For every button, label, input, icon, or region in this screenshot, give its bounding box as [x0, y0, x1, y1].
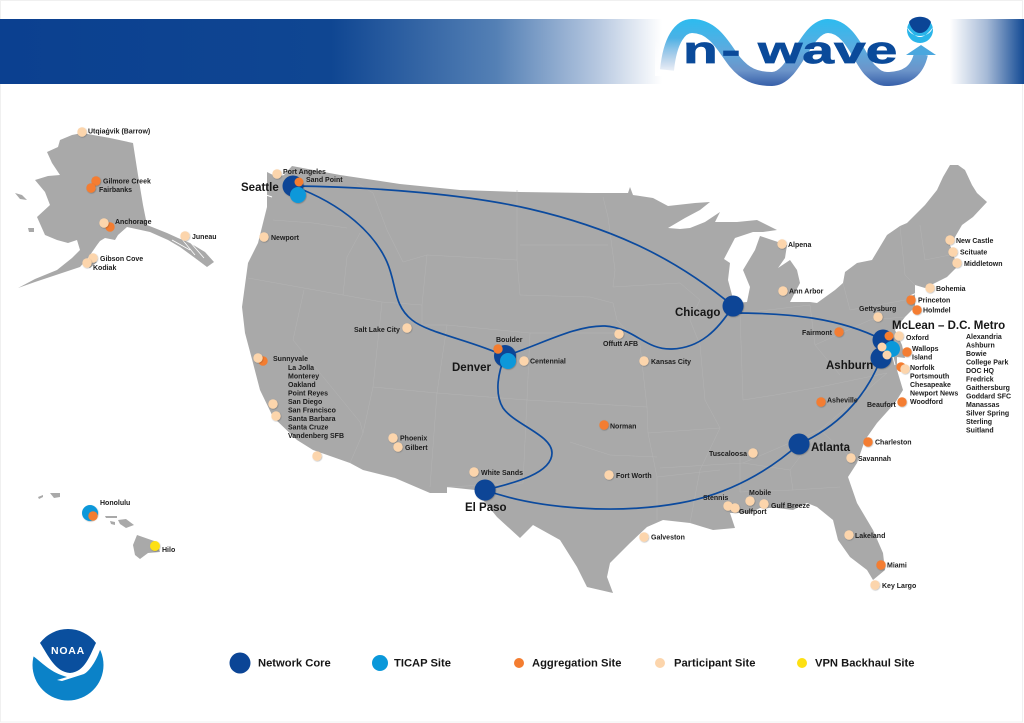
site: Asheville — [816, 397, 858, 407]
site: Utqiagvik: Utqiaġvik (Barrow) — [88, 128, 150, 136]
site: Fort Worth — [604, 470, 652, 480]
site: California cluster: La Jolla — [288, 365, 314, 372]
site: McLean metro list: Goddard SFC — [966, 394, 1011, 400]
site: Asheville: Asheville — [827, 398, 858, 404]
header band right — [950, 19, 1024, 84]
site: Fairmont — [802, 327, 844, 337]
site: Gettysburg — [859, 306, 896, 322]
site: McLean metro list: Fredrick — [966, 376, 994, 384]
legend — [230, 652, 914, 674]
site: Juneau — [180, 231, 217, 241]
site: White Sands: White Sands — [481, 470, 523, 477]
site: Phoenix — [388, 433, 427, 443]
site: Gibson Cove: Gibson Cove — [100, 256, 143, 263]
site: Scituate: Scituate — [960, 250, 987, 256]
site: Fort Worth: Fort Worth — [616, 473, 652, 480]
network links — [293, 186, 883, 509]
site: Norman: Norman — [610, 424, 636, 430]
logo: n-wave: n — [683, 29, 718, 72]
site: Chicago: Chicago — [675, 307, 720, 319]
site: Fairbanks: Fairbanks — [99, 187, 132, 194]
header band left — [0, 19, 662, 84]
site: Savannah — [846, 453, 891, 463]
site: McLean metro list: Alexandria — [966, 334, 1002, 341]
site: Norfolk cluster: Chesapeake — [910, 382, 951, 389]
site: Wallops Island: Wallops — [912, 346, 939, 353]
site: Beaufort — [867, 397, 907, 409]
site: California cluster: Monterey — [288, 374, 319, 380]
site: Gilmore Creek: Gilmore Creek — [103, 178, 151, 186]
site: Hilo — [150, 541, 175, 554]
site: McLean and Ashburn: McLean – D.C. Metro — [892, 320, 1005, 332]
site: Wallops Island — [902, 346, 939, 362]
site: Kansas City: Kansas City — [651, 359, 691, 366]
site: Ann Arbor: Ann Arbor — [789, 288, 824, 296]
site: Denver — [452, 337, 523, 374]
legend: VPN backhaul site: VPN Backhaul Site — [815, 658, 914, 670]
site: Oxford: Oxford — [906, 335, 929, 342]
site: Ann Arbor — [778, 286, 824, 296]
site: McLean metro list: DOC HQ — [966, 368, 995, 375]
legend: TICAP site — [372, 655, 451, 671]
site: Middletown — [952, 258, 1002, 268]
site: Holmdel: Holmdel — [923, 308, 951, 314]
site: Lakeland: Lakeland — [855, 533, 885, 540]
site: California cluster: Santa Cruze — [288, 424, 329, 432]
site: Gulf coast cluster: Mobile — [749, 490, 771, 497]
site: Tuscaloosa: Tuscaloosa — [709, 451, 747, 458]
site: Port Angeles: Port Angeles — [283, 169, 326, 176]
site: McLean metro list: Bowie — [966, 351, 987, 358]
site: Newport — [259, 232, 300, 242]
site: Norman — [599, 420, 636, 430]
site: Port Angeles — [272, 169, 326, 179]
site: Fairbanks — [86, 183, 132, 194]
logo: n-wave — [655, 17, 936, 79]
site: New Castle: New Castle — [956, 238, 993, 245]
site: California cluster: Point Reyes — [288, 390, 328, 398]
site: Atlanta: Atlanta — [811, 442, 851, 454]
site: Galveston — [639, 532, 685, 542]
site: California cluster — [253, 353, 344, 461]
logo: NOAA: NOAA — [51, 645, 85, 657]
site: McLean and Ashburn — [826, 320, 1005, 372]
site: Holmdel — [912, 305, 951, 315]
site: Alpena — [777, 239, 811, 249]
site: Tuscaloosa — [709, 448, 758, 458]
site: Anchorage — [99, 218, 152, 232]
site: California cluster: Vandenberg SFB — [288, 433, 344, 440]
site: Norfolk cluster: Newport News — [910, 390, 958, 398]
site: Denver: Boulder — [496, 337, 523, 344]
site: Juneau: Juneau — [192, 234, 217, 241]
site: El Paso: El Paso — [465, 502, 507, 514]
site: Seattle: Seattle — [241, 182, 279, 194]
site: Anchorage: Anchorage — [115, 219, 152, 226]
site: Hilo: Hilo — [162, 547, 175, 554]
site: Beaufort: Beaufort — [867, 402, 896, 409]
site: Wallops Island: Island — [912, 354, 932, 362]
site: Bohemia — [925, 283, 966, 293]
legend: network core: Network Core — [258, 658, 331, 670]
site: Offutt AFB: Offutt AFB — [603, 341, 638, 348]
site: California cluster: San Diego — [288, 399, 322, 406]
site: Gulf coast cluster: Gulf Breeze — [771, 503, 810, 510]
site: Gilbert — [393, 442, 428, 452]
site: Honolulu: Honolulu — [100, 500, 130, 507]
site: Key Largo: Key Largo — [882, 583, 916, 590]
site: Lakeland — [844, 530, 885, 540]
site: Phoenix: Phoenix — [400, 436, 427, 442]
site: Norfolk cluster: Norfolk — [910, 365, 935, 372]
site: Scituate — [948, 247, 987, 257]
site: Gibson Cove — [88, 253, 143, 263]
site: Norfolk cluster: Portsmouth — [910, 374, 949, 380]
logo: n-wave: - — [722, 29, 740, 72]
legend: TICAP site: TICAP Site — [394, 658, 451, 670]
site: McLean metro list: Sterling — [966, 419, 992, 426]
site: McLean metro list: Suitland — [966, 428, 994, 434]
site: Centennial: Centennial — [530, 358, 566, 366]
site: Offutt AFB — [603, 329, 638, 348]
map: Hawaii — [38, 493, 160, 559]
site: Alpena: Alpena — [788, 242, 811, 249]
site: Charleston — [863, 437, 912, 447]
site: Seattle — [241, 176, 343, 203]
map: contiguous United States — [242, 165, 987, 593]
site: McLean metro list: College Park — [966, 360, 1009, 366]
site: Kodiak: Kodiak — [93, 265, 116, 272]
site: Key Largo — [870, 580, 916, 590]
site: Miami — [876, 560, 907, 570]
site: Centennial — [519, 356, 566, 366]
site: Gulf coast cluster — [703, 490, 810, 516]
site: Gettysburg: Gettysburg — [859, 306, 896, 313]
site: McLean metro list — [966, 334, 1011, 434]
site: Kodiak — [82, 258, 116, 272]
site: Newport: Newport — [271, 235, 300, 242]
site: Charleston: Charleston — [875, 440, 912, 446]
site: Gulf coast cluster: Gulfport — [739, 509, 767, 516]
legend: aggregation site: Aggregation Site — [532, 658, 622, 670]
site: Bohemia: Bohemia — [936, 286, 966, 293]
site: Savannah: Savannah — [858, 456, 891, 463]
site: White Sands — [469, 467, 523, 477]
site: Atlanta — [788, 434, 851, 454]
site: Chicago — [675, 296, 744, 319]
site: Miami: Miami — [887, 562, 907, 570]
site: Galveston: Galveston — [651, 534, 685, 542]
site: Kansas City — [639, 356, 691, 366]
site: Norfolk cluster — [896, 362, 958, 406]
site: Utqiagvik — [77, 127, 150, 137]
site: New Castle — [945, 235, 993, 245]
site: California cluster: Oakland — [288, 382, 316, 389]
site: McLean metro list: Silver Spring — [966, 410, 1009, 418]
site: Gilmore Creek — [91, 176, 151, 186]
site: Honolulu — [82, 500, 130, 521]
site: McLean metro list: Ashburn — [966, 342, 995, 350]
map: Alaska — [15, 133, 214, 288]
site: El Paso — [465, 480, 507, 514]
site: Gilbert: Gilbert — [405, 445, 428, 452]
legend: network core — [230, 652, 331, 674]
site: California cluster: Sunnyvale — [273, 356, 308, 363]
legend: participant site: Participant Site — [674, 658, 755, 670]
site: Seattle: Sand Point — [306, 177, 343, 184]
site: Salt Lake City: Salt Lake City — [354, 327, 400, 334]
site: Oxford — [894, 331, 929, 342]
site: Gulf coast cluster: Stennis — [703, 495, 728, 502]
site: Norfolk cluster: Woodford — [910, 399, 943, 406]
site: Denver: Denver — [452, 362, 492, 374]
site: California cluster: Santa Barbara — [288, 416, 336, 423]
logo: NOAA — [30, 629, 104, 700]
site: Salt Lake City — [354, 323, 412, 334]
site: McLean and Ashburn: Ashburn — [826, 360, 873, 372]
site: Fairmont: Fairmont — [802, 330, 833, 337]
site: McLean metro list: Gaithersburg — [966, 385, 1010, 392]
site: Middletown: Middletown — [964, 261, 1002, 268]
site: Princeton: Princeton — [918, 298, 950, 304]
site: Princeton — [906, 295, 950, 305]
site: McLean metro list: Manassas — [966, 402, 1000, 409]
site: California cluster: San Francisco — [288, 408, 336, 414]
logo: n-wave: wave — [757, 29, 897, 72]
